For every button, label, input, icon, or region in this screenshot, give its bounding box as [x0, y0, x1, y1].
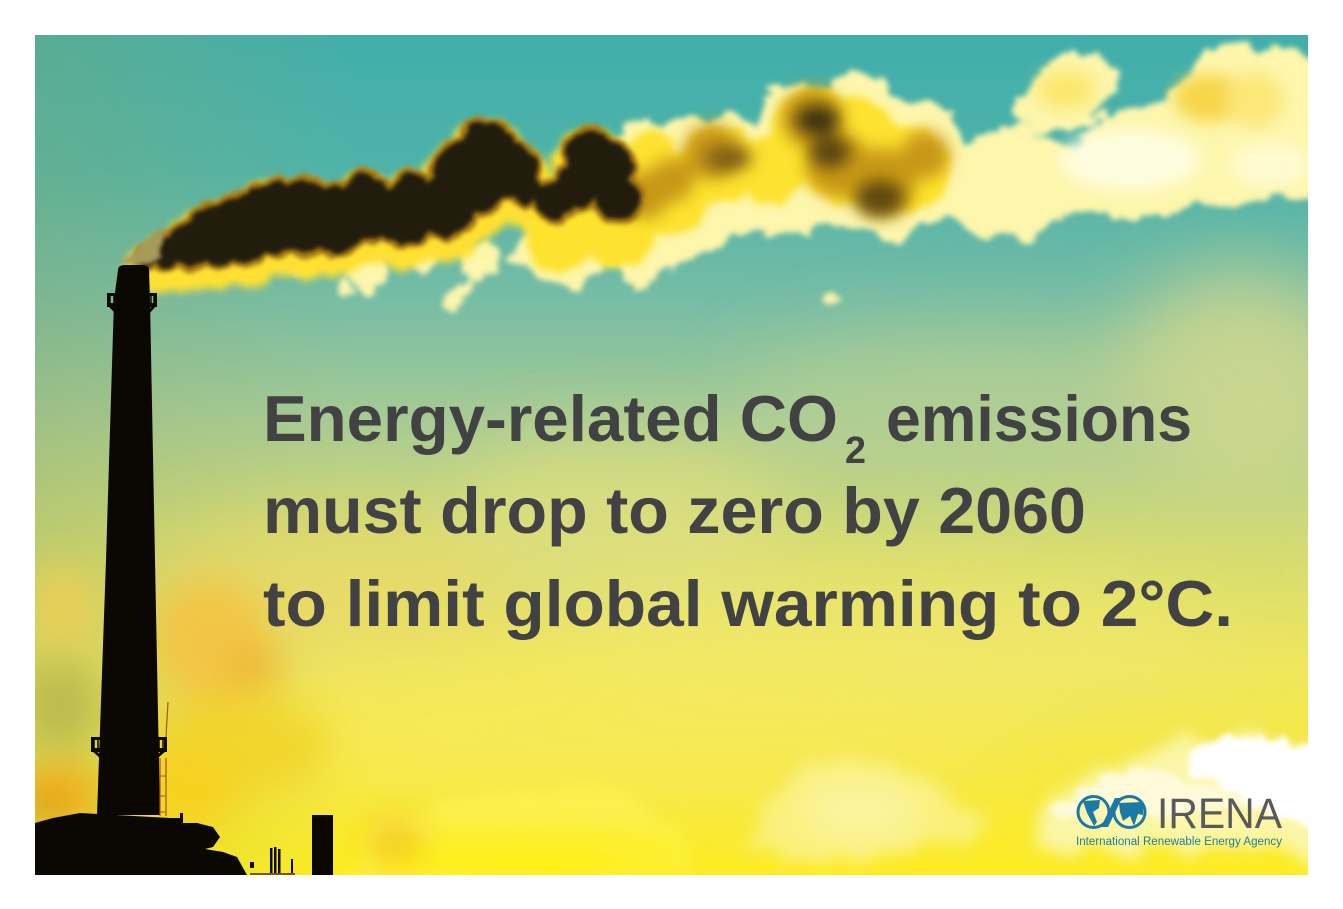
main chimney with platforms — [91, 265, 167, 815]
logo icon: infinity globes — [1078, 796, 1145, 828]
headline: Energy-related CO — [263, 382, 838, 455]
dark smoke core — [137, 122, 640, 267]
secondary stack and rods — [250, 815, 333, 875]
logo wordmark: IRENA — [1157, 790, 1282, 838]
headline: must drop to zero by 2060 — [263, 474, 1086, 547]
yellow tints in the pale cloud — [1036, 70, 1310, 190]
headline: to limit global warming to 2°C. — [263, 567, 1233, 640]
factory base silhouette — [35, 813, 247, 875]
IRENA logo — [1076, 790, 1282, 848]
mid section golden glow — [526, 88, 949, 274]
low yellow clouds — [350, 757, 990, 882]
gold rim of the dark smoke — [137, 122, 640, 267]
white cloud bottom right — [1040, 737, 1320, 860]
thin smoke at the stack mouth — [124, 228, 165, 264]
yellow-lit smoke plume — [124, 88, 949, 279]
pale smoke cloud — [231, 42, 1330, 314]
dark patches in the mid smoke — [704, 105, 904, 216]
headline: 2 — [845, 430, 866, 472]
headline: emissions — [886, 382, 1192, 455]
glow under the dark smoke — [137, 134, 640, 279]
logo tagline: International Renewable Energy Agency — [1076, 836, 1282, 848]
chimney ladder and antenna — [160, 702, 168, 816]
headline — [263, 382, 1233, 640]
haze clouds in the sky — [15, 270, 1343, 830]
orange-brown smoke patches — [621, 88, 949, 219]
